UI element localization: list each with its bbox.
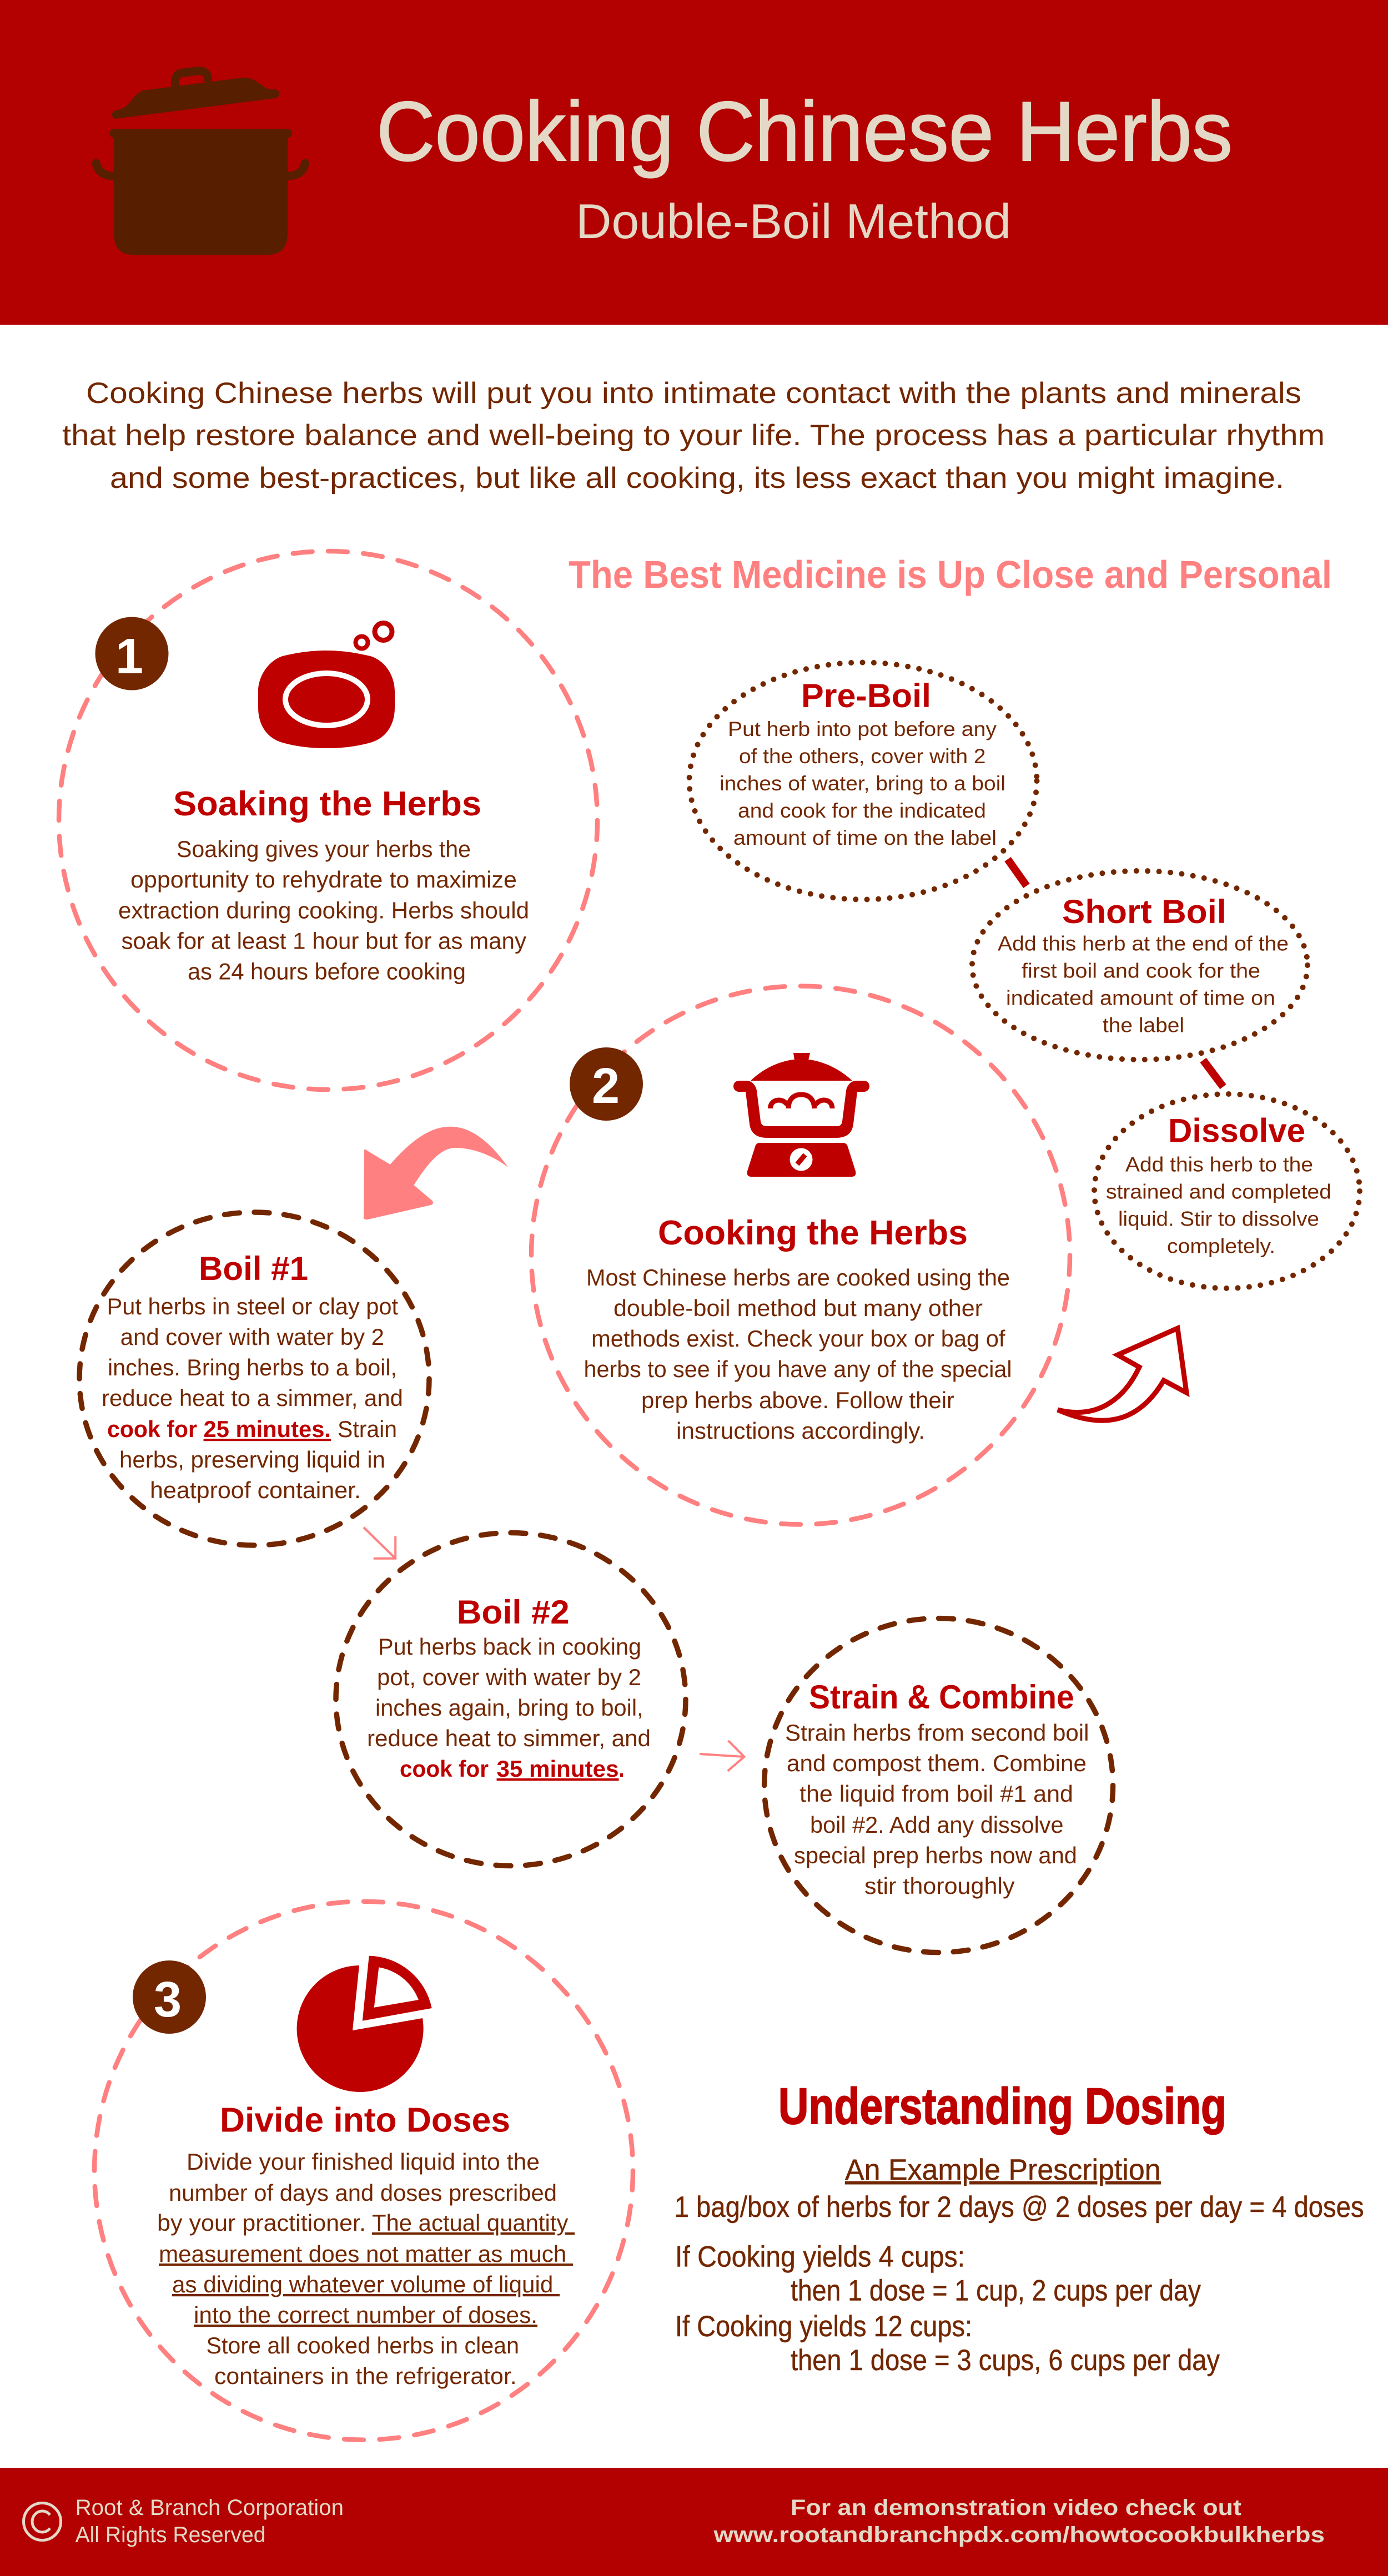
icon: soap bar with bubbles: [258, 623, 395, 748]
text: short boil description: [998, 931, 1289, 1037]
text: cooking description: double-boil method but many other: [613, 1295, 983, 1321]
number badge 1: 1: [115, 629, 143, 684]
text: boil 1 instructions: inches. Bring herbs to a boil,: [108, 1354, 397, 1380]
text: dissolve description: liquid. Stir to dissolve: [1118, 1207, 1319, 1230]
text: demonstration video link: [713, 2496, 1325, 2547]
text: boil 1 instructions: cook for: [107, 1416, 197, 1442]
text: boil 2 instructions: pot, cover with water by 2: [377, 1664, 641, 1690]
text: soaking description: soak for at least 1 hour but for as many: [121, 928, 526, 954]
text: cooking description: prep herbs above. Follow their: [641, 1387, 954, 1413]
text: strain and combine instructions: [785, 1720, 1089, 1899]
panel: dissolve: [1094, 1094, 1360, 1288]
text: divide description: into the correct number of doses.: [194, 2302, 537, 2328]
text: dissolve description: strained and completed: [1106, 1180, 1331, 1203]
text: short boil description: first boil and cook for the: [1022, 959, 1260, 982]
panel: boil 2: [336, 1533, 686, 1866]
text: strain and combine instructions: special prep herbs now and: [794, 1842, 1077, 1868]
text: pre-boil description: amount of time on the label: [733, 826, 997, 849]
text: demonstration video link: www.rootandbranchpdx.com/howtocookbulkherbs: [713, 2523, 1325, 2547]
text: soaking description: extraction during cooking. Herbs should: [118, 897, 529, 924]
heading: boil 2: Boil #2: [457, 1594, 570, 1631]
number badge 3: 3: [154, 1972, 182, 2028]
text: dosing example: If Cooking yields 4 cups:: [675, 2240, 965, 2273]
arrow: pink arrow to boil 1: [364, 1127, 508, 1219]
text: soaking description: [118, 836, 529, 985]
text: demonstration video link: For an demonstration video check out: [791, 2496, 1241, 2520]
text: dissolve description: [1106, 1152, 1331, 1258]
text: copyright: All Rights Reserved: [76, 2523, 265, 2547]
text: boil 1 instructions: reduce heat to a simmer, and: [102, 1385, 403, 1411]
text: cooking description: Most Chinese herbs are cooked using the: [586, 1264, 1010, 1290]
text: boil 1 instructions: Put herbs in steel or clay pot: [107, 1293, 398, 1319]
text: dosing example: then 1 dose = 1 cup, 2 cups per day: [791, 2275, 1201, 2307]
icon: copyright symbol: [23, 2503, 61, 2540]
text: strain and combine instructions: the liquid from boil #1 and: [799, 1781, 1073, 1807]
text: divide description: as dividing whatever volume of liquid: [172, 2271, 560, 2297]
panel: step 3 divide into doses: [94, 1902, 633, 2440]
text: soaking description: opportunity to rehydrate to maximize: [130, 866, 517, 893]
text: pre-boil description: inches of water, bring to a boil: [720, 772, 1005, 795]
heading: understanding dosing: Understanding Dosing: [778, 2078, 1226, 2135]
text: dosing example: If Cooking yields 12 cups:: [675, 2310, 972, 2343]
text: boil 2 instructions: [367, 1634, 651, 1782]
text: boil 1 instructions: [102, 1293, 403, 1503]
text: soaking description: Soaking gives your herbs the: [177, 836, 471, 862]
arrow: boil 2 to strain and combine: [700, 1741, 744, 1771]
text: copyright: [76, 2496, 344, 2547]
text: divide description: by your practitioner.: [157, 2210, 366, 2236]
heading: pre-boil: Pre-Boil: [801, 677, 931, 714]
number badge 2: [570, 1047, 643, 1121]
panel: step 2 cooking the herbs: [531, 986, 1070, 1524]
heading: dissolve: Dissolve: [1168, 1112, 1305, 1149]
intro paragraph: that help restore balance and well-being to your life. The process has a particular rhythm: [62, 419, 1325, 452]
text: boil 1 instructions: Strain: [338, 1416, 397, 1442]
text: cooking description: instructions accordingly.: [676, 1418, 925, 1444]
heading: the best medicine: The Best Medicine is Up Close and Personal: [569, 553, 1332, 596]
text: soaking description: as 24 hours before cooking: [188, 958, 466, 985]
icon: pie chart with a slice removed: [297, 1956, 432, 2092]
text: boil 1 instructions: 25 minutes.: [203, 1416, 331, 1442]
number badge 3: [133, 1960, 206, 2034]
text: divide description: [157, 2149, 575, 2389]
heading: strain and combine: Strain & Combine: [809, 1678, 1074, 1716]
text: boil 2 instructions: cook for: [400, 1756, 489, 1782]
subheading: an example prescription: An Example Prescription: [845, 2154, 1161, 2186]
text: boil 1 instructions: heatproof container.: [150, 1477, 361, 1503]
text: copyright: Root & Branch Corporation: [76, 2496, 344, 2520]
text: short boil description: indicated amount of time on: [1006, 986, 1275, 1009]
number badge 2: 2: [592, 1058, 620, 1114]
header banner: [0, 0, 1388, 325]
intro paragraph: [62, 377, 1325, 495]
panel: pre-boil: [690, 663, 1037, 899]
subtitle: Double-Boil Method: [576, 194, 1011, 249]
text: dissolve description: completely.: [1167, 1234, 1275, 1258]
text: strain and combine instructions: boil #2. Add any dissolve: [810, 1812, 1064, 1838]
text: boil 2 instructions: .: [618, 1756, 624, 1782]
text: cooking description: herbs to see if you have any of the special: [584, 1356, 1012, 1382]
text: strain and combine instructions: and compost them. Combine: [787, 1750, 1087, 1776]
panel: short boil: [972, 871, 1307, 1060]
text: divide description: number of days and doses prescribed: [169, 2180, 557, 2206]
text: boil 2 instructions: Put herbs back in cooking: [378, 1634, 641, 1660]
text: divide description: Store all cooked herbs in clean: [207, 2332, 519, 2358]
icon: cooking pot on burner: [733, 1053, 869, 1177]
text: divide description: Divide your finished liquid into the: [187, 2149, 540, 2175]
text: short boil description: the label: [1103, 1014, 1184, 1037]
heading: soaking the herbs: Soaking the Herbs: [173, 785, 481, 823]
heading: divide into doses: Divide into Doses: [220, 2101, 510, 2139]
text: short boil description: Add this herb at the end of the: [998, 931, 1289, 955]
text: boil 2 instructions: inches again, bring to boil,: [375, 1695, 643, 1721]
heading: boil 1: Boil #1: [199, 1250, 308, 1287]
text: divide description: containers in the refrigerator.: [214, 2363, 517, 2389]
text: pre-boil description: and cook for the indicated: [738, 799, 986, 822]
panel: understanding dosing: [675, 2078, 1364, 2377]
text: boil 1 instructions: herbs, preserving liquid in: [119, 1446, 385, 1473]
connector: pre-boil to short boil: [1008, 859, 1027, 886]
intro paragraph: Cooking Chinese herbs will put you into intimate contact with the plants and minerals: [86, 377, 1301, 410]
text: dosing example: then 1 dose = 3 cups, 6 cups per day: [791, 2344, 1220, 2377]
arrow: outlined red arrow to special herbs: [1058, 1328, 1186, 1420]
text: dosing example: [675, 2191, 1364, 2377]
footer banner: [0, 2468, 1388, 2576]
text: divide description: measurement does not matter as much: [159, 2241, 573, 2267]
title: Cooking Chinese Herbs: [376, 84, 1233, 179]
text: pre-boil description: Put herb into pot before any: [728, 717, 997, 740]
text: boil 1 instructions: and cover with water by 2: [120, 1324, 384, 1350]
panel: boil 1: [79, 1212, 429, 1545]
panel: strain and combine: [765, 1619, 1113, 1953]
text: cooking description: [584, 1264, 1012, 1444]
text: strain and combine instructions: stir thoroughly: [864, 1873, 1015, 1899]
heading: cooking the herbs: Cooking the Herbs: [658, 1214, 968, 1252]
connector: short boil to dissolve: [1203, 1060, 1223, 1087]
arrow: boil 1 to boil 2: [364, 1528, 395, 1559]
heading: short boil: Short Boil: [1062, 893, 1226, 930]
text: divide description: The actual quantity: [372, 2210, 575, 2236]
text: pre-boil description: of the others, cover with 2: [739, 744, 986, 768]
text: boil 2 instructions: reduce heat to simmer, and: [367, 1725, 651, 1751]
text: cooking description: methods exist. Check your box or bag of: [591, 1325, 1005, 1352]
number badge 1: [95, 617, 169, 690]
intro paragraph: and some best-practices, but like all cooking, its less exact than you might imagine.: [110, 462, 1284, 495]
text: strain and combine instructions: Strain herbs from second boil: [785, 1720, 1089, 1746]
icon: cooking pot with lifted lid: [96, 71, 305, 255]
text: pre-boil description: [720, 717, 1005, 849]
text: dissolve description: Add this herb to the: [1125, 1152, 1313, 1176]
panel: step 1 soaking the herbs: [59, 551, 597, 1090]
text: boil 2 instructions: 35 minutes: [496, 1756, 618, 1782]
